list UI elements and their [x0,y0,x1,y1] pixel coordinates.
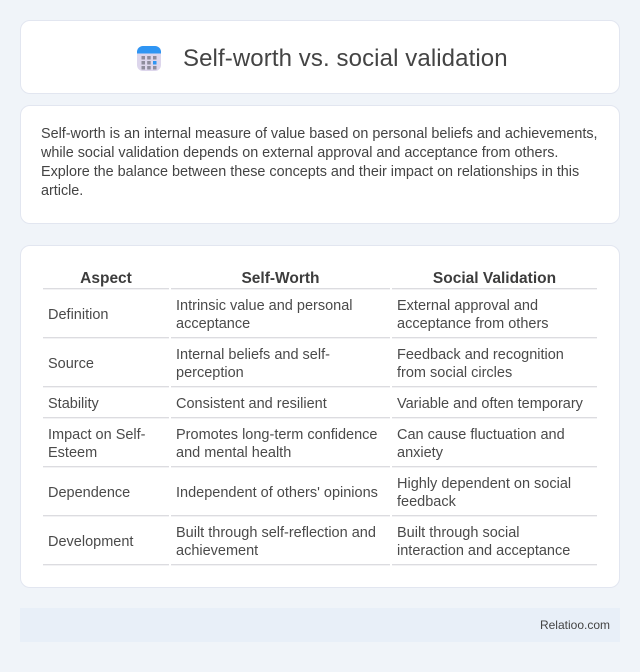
row: Stability: Consistent and resilient [176,396,327,412]
comparison table [43,270,597,566]
row: Dependence: Independent of others' opinions [176,485,378,501]
row: Definition: Definition [48,307,108,323]
text block: introduction: while social validation depends on external approval and acceptance from others. [41,145,558,161]
row: Source [48,347,564,381]
row: Definition [48,298,549,332]
footer text: Relatioo.com [540,618,610,632]
title: Self-worth vs. social validation [183,45,508,72]
row: Impact on Self-Esteem: and mental health [176,445,291,461]
row: Dependence: Dependence [48,485,130,501]
row: Definition: External approval and [397,298,538,314]
row: Dependence: feedback [397,494,456,510]
panel: comparison table card [20,245,620,588]
text block: introduction: Self-worth is an internal measure of value based on personal beliefs and achievements, [41,126,598,142]
row: Development: achievement [176,543,258,559]
row: Source: Source [48,356,94,372]
panel: title card [20,20,620,94]
row: Development: Built through social [397,525,520,541]
icon: calendar [137,46,161,71]
row: Source: from social circles [397,365,512,381]
row: Source: perception [176,365,244,381]
row: Impact on Self-Esteem: Can cause fluctuation and [397,427,565,443]
table header: Social Validation: Social Validation [433,270,556,287]
row: Dependence [48,476,571,510]
row: Impact on Self-Esteem: Esteem [48,445,97,461]
row: Stability: Stability [48,396,99,412]
row: Definition: acceptance [176,316,250,332]
text block: introduction: Explore the balance between these concepts and their impact on relationships in this [41,164,579,180]
row: Development: Development [48,534,133,550]
row: Development: interaction and acceptance [397,543,570,559]
row: Impact on Self-Esteem: Promotes long-term confidence [176,427,378,443]
text block: introduction: article. [41,183,83,199]
table header: Self-Worth: Self-Worth [241,270,320,287]
row: Impact on Self-Esteem: Impact on Self- [48,427,146,443]
table header: Aspect: Aspect [80,270,132,287]
row: Development [48,525,570,559]
panel: introduction card [20,105,620,224]
row: Definition: Intrinsic value and personal [176,298,353,314]
row: Dependence: Highly dependent on social [397,476,571,492]
row: Stability: Variable and often temporary [397,396,583,412]
row: Impact on Self-Esteem [48,427,565,461]
row: Definition: acceptance from others [397,316,549,332]
footer bar [20,608,620,642]
row: Development: Built through self-reflection and [176,525,376,541]
row: Source: Feedback and recognition [397,347,564,363]
text block: introduction [41,126,598,199]
row: Impact on Self-Esteem: anxiety [397,445,443,461]
row: Stability [48,396,583,412]
row: Source: Internal beliefs and self- [176,347,330,363]
